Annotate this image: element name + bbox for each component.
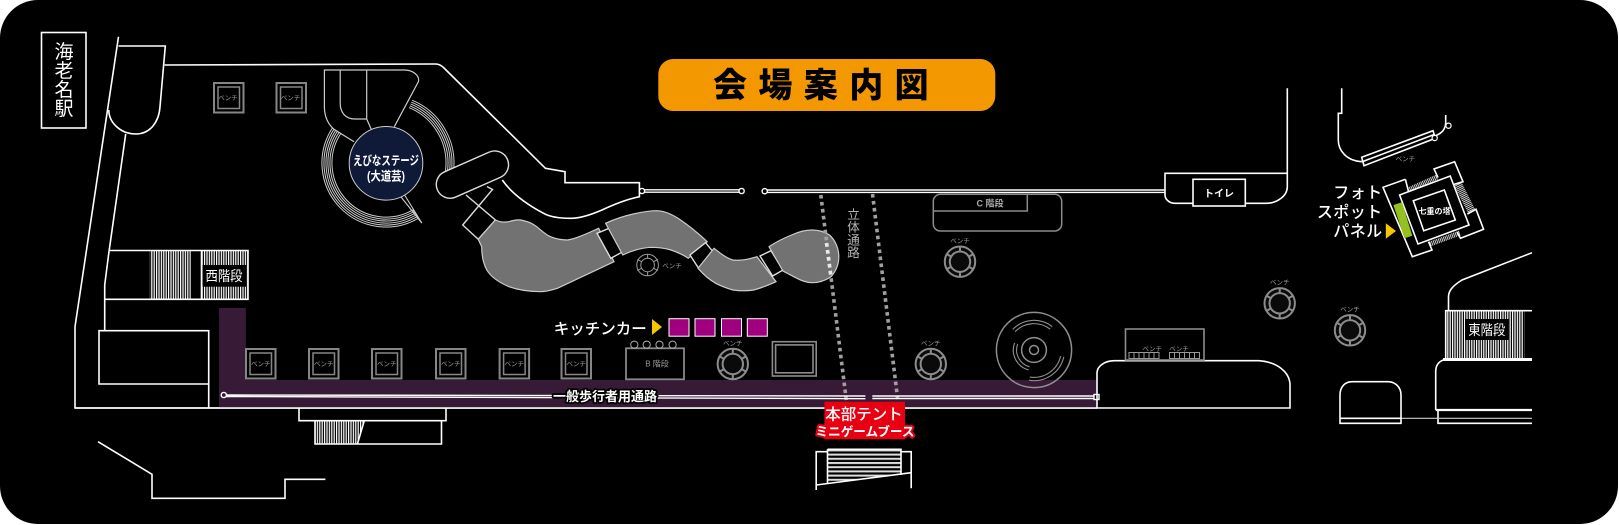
south-west outline: [98, 442, 325, 498]
bench box: [1126, 329, 1204, 360]
toilet block: [1165, 88, 1287, 206]
big circular feature: [996, 312, 1072, 388]
west stairs: 西階段: [206, 268, 242, 284]
seven-storey tower: 七重の塔: [1418, 206, 1450, 216]
west building rectangle: [99, 331, 209, 408]
stage circle: えびなステージ: (大道芸): [367, 168, 405, 184]
west stairs: [105, 250, 248, 299]
photo spot panel label: パネル: [1333, 222, 1382, 240]
round benches: ベンチ: [723, 340, 743, 348]
capsule platform: [432, 147, 513, 203]
headquarters tent label: 本部テント: [825, 406, 903, 424]
square benches lower: ベンチ: [566, 360, 586, 368]
south stairs: [816, 449, 911, 490]
small round bench near water: ベンチ: [662, 262, 682, 270]
square benches lower: ベンチ: [377, 360, 396, 368]
headquarters tent label: [816, 402, 914, 439]
east outline: [1401, 253, 1532, 423]
station label: 海老名駅: [52, 41, 73, 118]
general walkway band: [219, 308, 1097, 408]
kitchen car label: キッチンカー: [554, 320, 647, 338]
stage circle: えびなステージ: [349, 126, 423, 200]
water feature segment 2: [606, 211, 707, 258]
stage seating arcs: [322, 100, 454, 227]
round benches: [718, 237, 1365, 379]
B stairs: B 階段: [645, 358, 669, 368]
stage circle: えびなステージ: えびなステージ: [353, 154, 419, 168]
toilet block: トイレ: [1204, 188, 1234, 200]
photo spot panel label: フォト: [1333, 185, 1382, 202]
small round bench near water: [637, 254, 682, 276]
water feature segment 1: [478, 220, 614, 292]
water feature gap 2: [690, 243, 713, 268]
square benches upper: [214, 83, 306, 112]
square benches lower: ベンチ: [314, 360, 333, 368]
east dome building: [1097, 361, 1290, 408]
east stairs: [1443, 311, 1532, 360]
bench box: ベンチ: [1143, 345, 1162, 353]
title banner: 会場案内図: [713, 67, 940, 105]
water feature segment 4: [769, 230, 839, 283]
long bench: ベンチ: [1396, 155, 1415, 163]
water feature gap 3: [760, 251, 783, 276]
title banner: [658, 59, 995, 111]
west building outline: [75, 37, 1097, 408]
walkway double line: [221, 392, 1099, 400]
lower central stairs: [299, 408, 446, 444]
photo spot panel label: [1317, 185, 1396, 240]
water feature segment 3: [698, 248, 776, 291]
square benches lower: ベンチ: [251, 360, 270, 368]
square benches lower: [246, 349, 591, 378]
square benches lower: ベンチ: [505, 360, 524, 368]
east stairs: 東階段: [1468, 322, 1505, 338]
overpass dotted lines: [821, 194, 898, 402]
kitchen car stalls: [669, 319, 767, 336]
upper double lines: [639, 188, 1165, 194]
connector square: [463, 186, 495, 239]
north-east outline: [1338, 88, 1446, 162]
square benches lower: ベンチ: [441, 360, 460, 368]
round benches: ベンチ: [921, 340, 941, 348]
photo spot panel label: スポット: [1317, 204, 1382, 222]
round benches: ベンチ: [950, 237, 970, 245]
C stairs: C 階段: [976, 198, 1004, 208]
walkway label: 一般歩行者用通路: [553, 389, 657, 404]
round benches: ベンチ: [1340, 306, 1360, 314]
south line under walkway: [75, 407, 1097, 409]
B stairs: [626, 341, 684, 379]
square benches upper: ベンチ: [218, 94, 238, 102]
C stairs: [933, 194, 1062, 231]
water feature gap 1: [597, 227, 623, 258]
overpass label: 立体通路: [845, 208, 859, 259]
headquarters tent label: ミニゲームブース: [816, 424, 914, 439]
stage back structure: [324, 70, 419, 142]
small arch block: [1340, 382, 1401, 423]
round benches: ベンチ: [1270, 278, 1289, 286]
seven-storey tower: [1383, 162, 1484, 257]
bench box: ベンチ: [1169, 345, 1189, 353]
long bench: [1362, 123, 1451, 166]
station label: [42, 32, 86, 128]
square benches upper: ベンチ: [281, 94, 300, 102]
monument frame: [772, 342, 816, 376]
